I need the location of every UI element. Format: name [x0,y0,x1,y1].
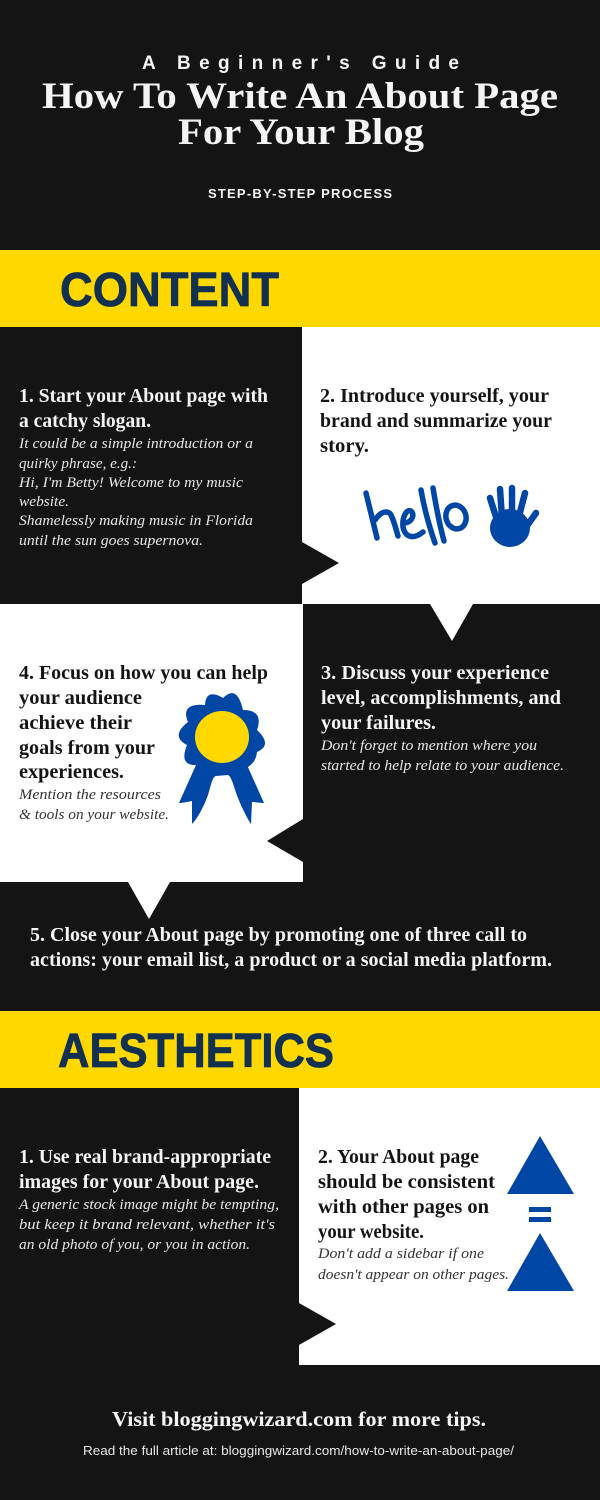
footer: call to visit and article link [83,1407,515,1458]
panel: step 3 experience: 3. Discuss your experience [321,662,549,684]
arrow: step 3 to step 4 [267,819,303,862]
panel: aesthetics 2 consistency: with other pages on [318,1196,490,1218]
section banner: content [0,250,600,327]
panel: step 4 help your audience: achieve their [19,712,132,734]
footer: call to visit and article link: Visit bloggingwizard.com for more tips. [112,1407,486,1431]
panel: step 5 call to action: actions: your email list, a product or a social media platform. [30,949,552,971]
panel: step 2 introduce yourself: story. [320,435,369,457]
panel: step 2 introduce yourself: 2. Introduce yourself, your [320,385,549,407]
main title: How To Write An About Page [42,76,558,117]
section banner: content: CONTENT [60,264,279,317]
icon: blue hand [490,488,536,547]
panel: step 4 help your audience: Mention the resources [18,787,161,803]
panel: aesthetics 2 consistency: doesn't appear on other pages. [318,1267,509,1283]
arrow: step 4 to step 5 [128,882,170,919]
panel: step 1 slogan: until the sun goes supernova. [19,533,203,549]
panel: aesthetics 2 consistency: your website. [318,1221,424,1243]
panel: step 4 help your audience: & tools on your website. [19,807,169,823]
panel: step 1 slogan: a catchy slogan. [19,410,151,432]
arrow: step 2 to step 3 [430,604,473,641]
panel: step 1 slogan: website. [19,494,69,510]
panel: step 5 call to action: 5. Close your About page by promoting one of three call to [30,924,527,946]
panel: step 3 experience [303,604,600,882]
panel: step 1 slogan: quirky phrase, e.g.: [19,456,137,472]
panel: step 1 slogan: Shamelessly making music in Florida [19,513,253,529]
panel: step 4 help your audience: 4. Focus on how you can help [19,662,268,684]
panel: step 2 introduce yourself: brand and summarize your [320,410,552,432]
panel: aesthetics 1 real images: images for your About page. [19,1171,259,1193]
panel: step 1 slogan: Hi, I'm Betty! Welcome to my music [18,475,243,491]
arrow: aesthetics 1 to 2 [299,1303,336,1345]
panel: step 3 experience: started to help relate to your audience. [321,758,564,774]
icon: triangle equals triangle [507,1136,574,1291]
main title [42,76,558,153]
panel: step 4 help your audience: goals from your [19,737,155,759]
panel: step 3 experience: Don't forget to mention where you [320,738,537,754]
panel: aesthetics 1 real images: but keep it brand relevant, whether it's [19,1217,275,1233]
section banner: aesthetics: AESTHETICS [58,1025,334,1078]
panel: aesthetics 1 real images: 1. Use real brand-appropriate [19,1146,271,1168]
panel: step 5 call to action [30,924,552,971]
arrow: step 1 to step 2 [302,542,339,584]
panel: step 4 help your audience [0,604,303,882]
footer: call to visit and article link: Read the full article at: bloggingwizard.com/how-to-write-an-about-page/ [83,1444,515,1458]
eyebrow: A Beginner's Guide: A Beginner's Guide [142,53,459,74]
panel: step 2 introduce yourself [302,327,600,604]
panel: step 1 slogan: 1. Start your About page with [19,385,269,407]
panel: step 1 slogan: It could be a simple introduction or a [18,436,253,452]
panel: step 3 experience: level, accomplishments, and [321,687,562,709]
icon: award ribbon [179,693,265,824]
icon: hello lettering [366,488,469,543]
header: title block [42,53,558,201]
panel: step 4 help your audience: experiences. [19,761,124,783]
panel: aesthetics 2 consistency [299,1088,600,1365]
panel: aesthetics 2 consistency: Don't add a sidebar if one [317,1246,484,1262]
subtitle: step-by-step process: STEP-BY-STEP PROCESS [208,186,392,201]
panel: aesthetics 1 real images [18,1146,279,1253]
panel: aesthetics 1 real images: an old photo of you, or you in action. [19,1237,250,1253]
main title: For Your Blog [178,112,425,153]
panel: step 3 experience: your failures. [321,712,436,734]
panel: aesthetics 2 consistency: 2. Your About page [318,1146,479,1168]
section banner: aesthetics [0,1011,600,1088]
panel: step 1 slogan [0,327,302,604]
panel: aesthetics 1 real images: A generic stock image might be tempting, [18,1197,279,1213]
panel: aesthetics 2 consistency: should be consistent [318,1171,495,1193]
panel: step 4 help your audience: your audience [19,687,142,709]
